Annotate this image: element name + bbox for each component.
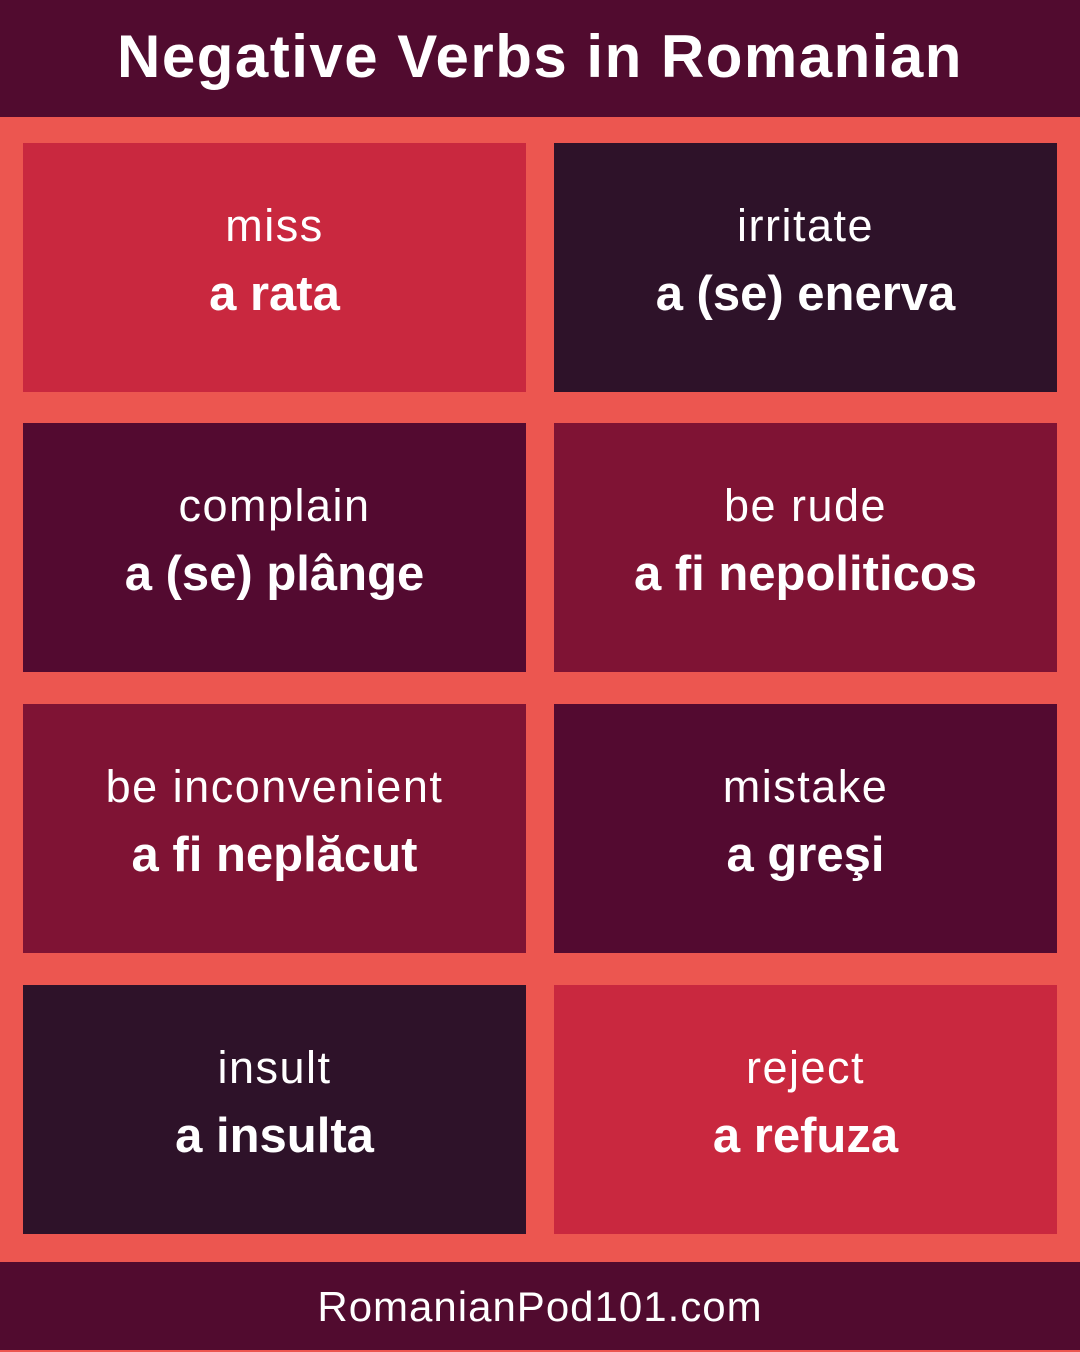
card: be inconvenient: be inconvenient <box>106 761 443 812</box>
footer: RomanianPod101.com <box>317 1283 763 1330</box>
footer <box>0 1262 1080 1350</box>
card: miss <box>23 143 526 392</box>
card: be rude <box>554 423 1057 672</box>
card: reject: a refuza <box>713 1109 898 1163</box>
card: be rude: a fi nepoliticos <box>634 547 977 601</box>
card: be inconvenient <box>23 704 526 953</box>
card: complain: complain <box>178 480 371 531</box>
card: miss: a rata <box>209 267 340 321</box>
card: reject <box>554 985 1057 1234</box>
card: mistake <box>554 704 1057 953</box>
card: be rude: be rude <box>724 480 887 531</box>
card: irritate: irritate <box>737 200 874 251</box>
card: mistake: a greşi <box>726 828 884 882</box>
title <box>0 0 1080 117</box>
card: insult <box>23 985 526 1234</box>
card: be inconvenient: a fi neplăcut <box>132 828 417 882</box>
card: mistake: mistake <box>723 761 888 812</box>
card: complain: a (se) plânge <box>125 547 424 601</box>
card: irritate: a (se) enerva <box>656 267 955 321</box>
card: irritate <box>554 143 1057 392</box>
card: insult: a insulta <box>175 1109 374 1163</box>
title: Negative Verbs in Romanian <box>117 23 963 90</box>
card: reject: reject <box>746 1042 865 1093</box>
card: complain <box>23 423 526 672</box>
card: miss: miss <box>225 200 324 251</box>
card: insult: insult <box>217 1042 332 1093</box>
